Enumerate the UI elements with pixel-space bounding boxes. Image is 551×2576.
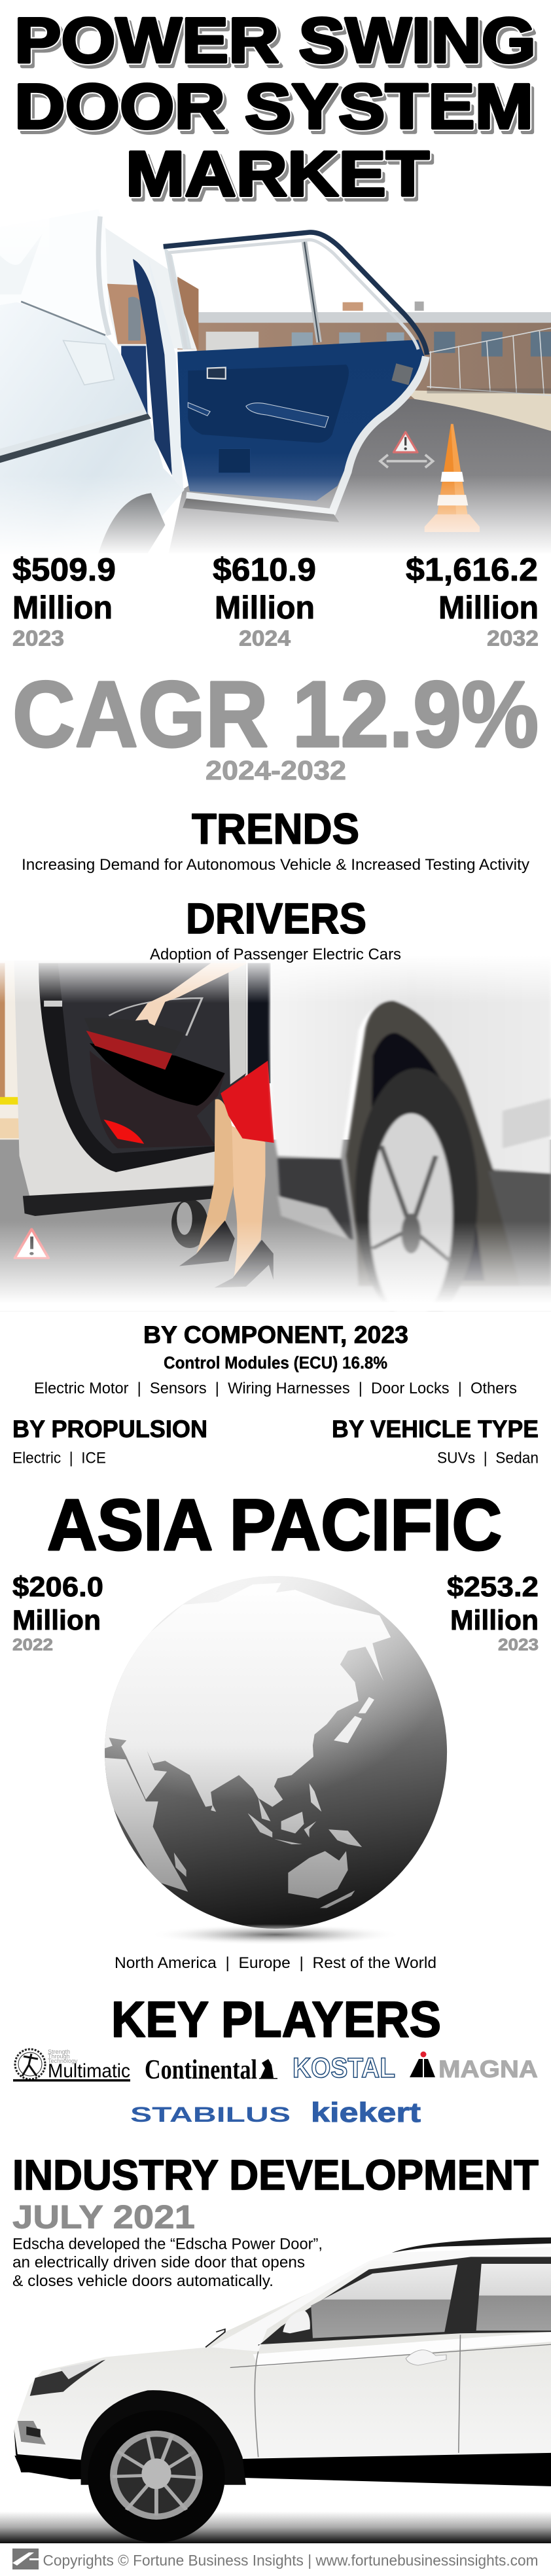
opened door [14, 961, 270, 1216]
2023 region value: 2023 [498, 1636, 539, 1655]
footer bar [0, 2543, 551, 2576]
logo: MAGNA [410, 2051, 538, 2083]
traffic cone [425, 424, 480, 532]
development text: an electrically driven side door that opens [12, 2254, 305, 2271]
globe [88, 1576, 447, 1929]
door shadow on ground [183, 499, 339, 522]
title: POWER SWING [14, 5, 536, 76]
development text: & closes vehicle doors automatically. [12, 2272, 274, 2290]
title: DOOR SYSTEM [14, 71, 533, 142]
2023 region value: Million [450, 1605, 539, 1636]
roof rail [392, 2238, 551, 2253]
key players heading: KEY PLAYERS [111, 1992, 441, 2048]
title: MARKET [126, 138, 429, 209]
drivers text: Adoption of Passenger Electric Cars [150, 946, 401, 963]
leading component: Control Modules (ECU) 16.8% [164, 1353, 387, 1372]
logo: kiekert: kiekert [311, 2097, 421, 2128]
title: MARKET [126, 138, 429, 209]
2023 value: Million [12, 590, 113, 626]
logo: Multimatic: Strength [48, 2048, 70, 2055]
door pillar [133, 259, 172, 475]
front wheel [81, 2390, 246, 2543]
title: DOOR SYSTEM [14, 71, 533, 142]
2024 value: $610.9 [213, 552, 316, 588]
door outer rim [187, 357, 426, 512]
logo: Multimatic: Multimatic [48, 2060, 130, 2082]
development date: JULY 2021 [12, 2199, 195, 2236]
driver photo: woman leaving car [0, 956, 551, 1324]
logo: Continental: Continental [145, 2055, 257, 2085]
title: DOOR SYSTEM [18, 75, 537, 146]
by vehicle type [332, 1416, 539, 1467]
body [14, 2247, 551, 2463]
title [14, 5, 539, 213]
warning triangle [393, 432, 418, 452]
footer logo [12, 2549, 39, 2569]
ground shadow [0, 2485, 551, 2544]
other regions: North America | Europe | Rest of the World [115, 1954, 436, 1972]
interior opening [104, 227, 197, 349]
arrow [380, 455, 433, 467]
by component heading: BY COMPONENT, 2023 [143, 1321, 408, 1348]
car illustration [0, 2238, 551, 2544]
door panel [177, 340, 425, 501]
woman [135, 963, 274, 1287]
copyright: Copyrights © Fortune Business Insights | www.fortunebusinessinsights.com [43, 2552, 538, 2569]
title: MARKET [129, 142, 433, 213]
building behind car [177, 277, 551, 402]
street background [0, 961, 551, 1312]
rear wheel [171, 1199, 208, 1248]
title: POWER SWING [14, 5, 536, 76]
logo: STABILUS: STABILUS [130, 2103, 291, 2126]
2022 region value: $206.0 [12, 1571, 103, 1603]
fence [427, 328, 551, 395]
2023 region value: $253.2 [447, 1571, 539, 1603]
region heading: ASIA PACIFIC [47, 1485, 502, 1565]
2032 value: Million [438, 590, 539, 626]
2022 region value: Million [12, 1605, 101, 1636]
2024 value [213, 552, 316, 651]
car body [270, 956, 551, 1324]
windows [258, 2257, 551, 2346]
trends text: Increasing Demand for Autonomous Vehicle & Increased Testing Activity [22, 856, 530, 874]
2032 value [406, 552, 539, 651]
warning triangle [15, 1229, 48, 1258]
wiper [205, 2329, 225, 2347]
by propulsion: BY PROPULSION [12, 1416, 207, 1442]
component list: Electric Motor | Sensors | Wiring Harnesses | Door Locks | Others [34, 1380, 517, 1397]
2023 value: $509.9 [12, 552, 116, 588]
development text [12, 2236, 323, 2290]
mirror [283, 2310, 310, 2333]
drivers heading: DRIVERS [186, 894, 366, 942]
2023 value: 2023 [12, 626, 64, 651]
logo: MAGNA: MAGNA [438, 2056, 538, 2083]
globe shadow [150, 1924, 401, 1945]
door window frame [164, 232, 427, 512]
2032 value: 2032 [487, 626, 539, 651]
2023 region value [447, 1571, 539, 1655]
2032 value: $1,616.2 [406, 552, 538, 588]
logo: Multimatic: Through [48, 2053, 70, 2060]
ground [169, 399, 551, 554]
development text: Edscha developed the “Edscha Power Door”, [12, 2236, 323, 2253]
hero photo: open car door with cone [0, 207, 551, 555]
2022 region value [12, 1571, 103, 1655]
2022 region value: 2022 [12, 1636, 53, 1655]
door handle [406, 2350, 446, 2365]
2024 value: Million [215, 590, 315, 626]
2024 value: 2024 [239, 626, 291, 651]
by vehicle type: SUVs | Sedan [437, 1449, 539, 1467]
headlight [30, 2360, 105, 2396]
inner door trim [188, 365, 349, 442]
fog lamp and bumper [18, 2421, 46, 2444]
logo: Multimatic: Technology [48, 2058, 78, 2064]
sill [14, 2452, 551, 2486]
logo: Multimatic [13, 2048, 130, 2082]
car body [0, 302, 185, 554]
2023 value [12, 552, 116, 651]
by propulsion: Electric | ICE [12, 1449, 106, 1467]
title: POWER SWING [18, 9, 539, 80]
CAGR period: 2024-2032 [205, 755, 346, 785]
trends heading: TRENDS [192, 804, 359, 853]
logo: KOSTAL: KOSTAL [293, 2052, 395, 2084]
by propulsion [12, 1416, 207, 1467]
by vehicle type: BY VEHICLE TYPE [332, 1416, 539, 1442]
industry development heading: INDUSTRY DEVELOPMENT [12, 2151, 539, 2199]
